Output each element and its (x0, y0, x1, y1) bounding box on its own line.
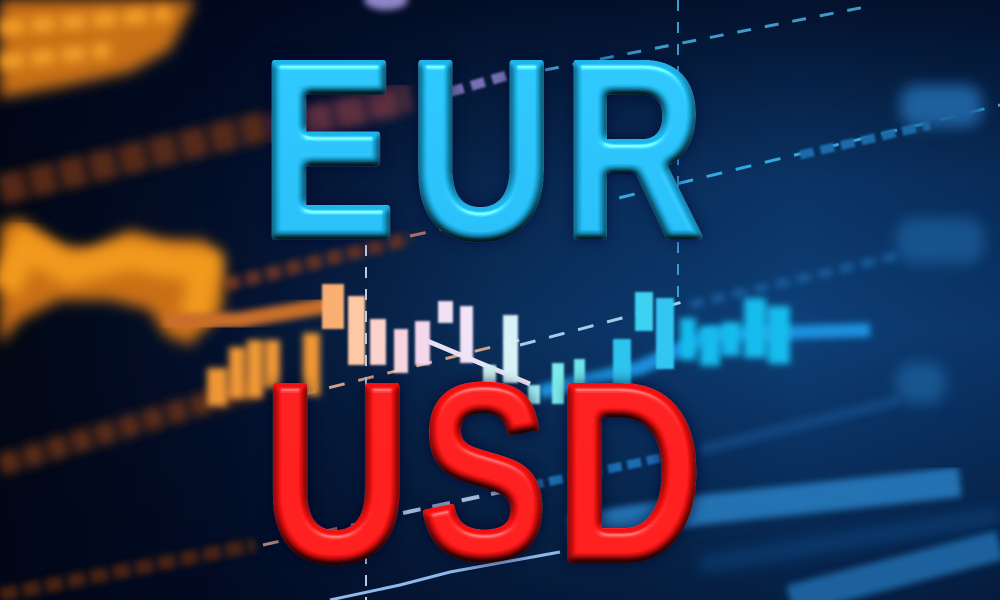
title: EUR (261, 8, 704, 291)
title: EUR: E (261, 10, 395, 291)
title: EUR: R (563, 8, 704, 290)
title: EUR: E (261, 10, 395, 291)
cyan and white trend lines (425, 330, 870, 392)
title: EUR: U (409, 9, 553, 291)
title: EUR: U (409, 9, 553, 291)
orange blurred chart at upper left (0, 0, 408, 600)
lower blue bands (330, 482, 1000, 600)
sharp candlesticks (322, 284, 674, 404)
orange blurred candles (207, 333, 320, 406)
orange price curve (0, 218, 330, 345)
title: EUR: R (563, 8, 704, 290)
cyan blurred candles (680, 298, 790, 366)
title: USD (264, 333, 702, 600)
right side blurred blue markers (896, 85, 984, 404)
